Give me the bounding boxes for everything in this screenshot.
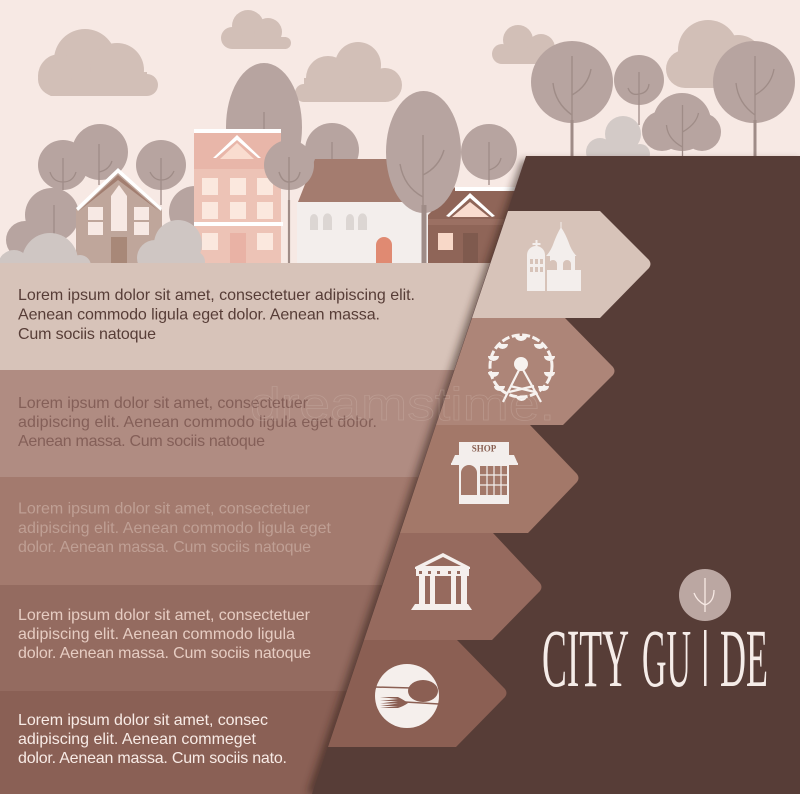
text block 3: Lorem ipsum dolor sit amet, consectetuer <box>18 500 311 518</box>
text block 5 <box>18 712 287 767</box>
icon: shop <box>451 442 518 504</box>
text block 1: Lorem ipsum dolor sit amet, consectetuer adipiscing elit. <box>18 287 415 304</box>
text block 2: Lorem ipsum dolor sit amet, consectetuer <box>18 395 309 412</box>
text block 5: Lorem ipsum dolor sit amet, consec <box>18 712 268 729</box>
white church <box>297 159 428 263</box>
icon: shop: SHOP <box>472 444 497 454</box>
band 4 <box>0 585 440 691</box>
text block 1: Aenean commodo ligula eget dolor. Aenean massa. <box>18 306 380 324</box>
band 1 <box>0 263 520 370</box>
watermark: dreamstime. <box>250 378 555 430</box>
text block 2: adipiscing elit. Aenean commodo ligula eget dolor. <box>18 414 377 431</box>
logo <box>542 569 768 704</box>
text bands <box>0 263 520 794</box>
band 5 <box>0 691 420 794</box>
left bushes <box>0 220 205 289</box>
band 2 <box>0 370 500 477</box>
text block 3 <box>18 500 332 556</box>
tree trunks <box>50 56 774 235</box>
arrow 2 <box>436 318 614 425</box>
text block 1 <box>18 287 415 343</box>
tree emblem <box>679 569 731 621</box>
text block 4: Lorem ipsum dolor sit amet, consectetuer <box>18 607 311 624</box>
title: GU <box>642 612 691 704</box>
text block 1: Cum sociis natoque <box>18 326 156 343</box>
cloud 4 <box>492 25 555 64</box>
title: CITY <box>542 612 629 704</box>
back trees <box>6 41 795 259</box>
arrow 5 <box>328 640 506 747</box>
text block 4 <box>18 607 311 662</box>
band 3 <box>0 477 480 585</box>
text block 3: dolor. Aenean massa. Cum sociis natoque <box>18 539 311 556</box>
cloud 3 <box>295 42 402 102</box>
text block 3: adipiscing elit. Aenean commodo ligula eget <box>18 520 332 537</box>
text block 2 <box>18 395 377 450</box>
text block 4: adipiscing elit. Aenean commodo ligula <box>18 626 295 643</box>
icon: museum <box>411 553 472 610</box>
text block 5: adipiscing elit. Aenean commeget <box>18 731 257 748</box>
text block 2: Aenean massa. Cum sociis natoque <box>18 433 265 450</box>
pink building <box>194 129 283 263</box>
clouds <box>38 10 763 102</box>
tan house <box>76 168 162 263</box>
dark panel <box>312 156 800 794</box>
front trees <box>264 91 461 263</box>
icon: church <box>527 222 581 291</box>
arrow 1 <box>472 211 650 318</box>
icon: ferris wheel <box>488 335 555 402</box>
cloud 1 <box>38 29 158 98</box>
arrow 4 <box>364 533 542 640</box>
panel text <box>18 287 415 767</box>
light bush on the right <box>586 116 650 166</box>
cloud 2 <box>221 10 291 49</box>
brown house <box>428 187 518 263</box>
text block 5: dolor. Aenean massa. Cum sociis nato. <box>18 750 287 767</box>
cloud 5 <box>666 20 763 88</box>
arrow 3 <box>400 425 578 533</box>
text block 4: dolor. Aenean massa. Cum sociis natoque <box>18 645 311 662</box>
icon: plate with spoon and fork <box>375 664 439 728</box>
